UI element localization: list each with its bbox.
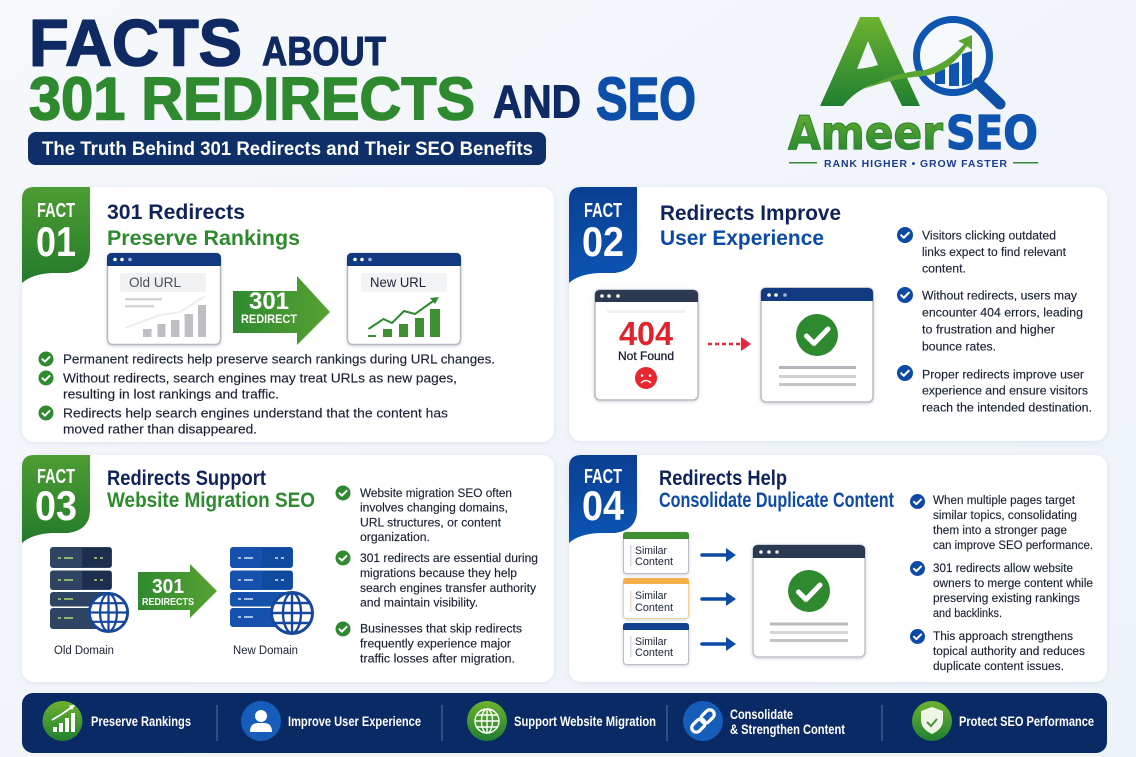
badge: fact 01: FACT (37, 200, 75, 222)
heading: fact 02 (660, 202, 841, 250)
heading: fact 04 (659, 467, 894, 512)
bullets: fact 04: When multiple pages target (933, 493, 1076, 507)
arrow: 301 redirects: 301 (152, 576, 184, 598)
bullets: fact 03 (336, 486, 538, 666)
bullets: fact 03: involves changing domains, (360, 500, 508, 514)
item: consolidate and strengthen content: Consolidate (730, 707, 793, 722)
browser: consolidated (753, 545, 865, 657)
heading: fact 01: Preserve Rankings (107, 227, 300, 250)
bullets: fact 03: frequently experience major (360, 636, 511, 650)
badge: fact 03: FACT (37, 466, 75, 488)
mini browser: blue (623, 623, 689, 664)
item: preserve rankings: Preserve Rankings (91, 714, 191, 729)
browser: 404: 404 (619, 315, 674, 352)
heading: fact 03: Redirects Support (107, 467, 266, 490)
bullets: fact 04: preserving existing rankings (933, 591, 1080, 605)
bullets: fact 03: and maintain visibility. (360, 596, 478, 610)
bullets: fact 03: Businesses that skip redirects (360, 622, 522, 636)
badge: fact 02: FACT (584, 200, 622, 222)
bullets: fact 01: Redirects help search engines understand that the content has (63, 406, 449, 420)
item: consolidate and strengthen content: & Strengthen Content (730, 722, 845, 737)
icon: globe old (89, 593, 128, 632)
panel: fact 01 (22, 187, 554, 442)
bullets: fact 02: experience and ensure visitors (922, 384, 1088, 398)
heading: fact 02: User Experience (660, 227, 824, 250)
bullets: fact 03: 301 redirects are essential during (360, 551, 538, 565)
bullets: fact 03: organization. (360, 530, 430, 544)
heading: fact 02: Redirects Improve (660, 202, 841, 225)
bullets: fact 03: traffic losses after migration. (360, 652, 515, 666)
server: new domain (230, 547, 312, 634)
label: old domain: Old Domain (54, 645, 114, 657)
bullets: fact 04 (910, 493, 1093, 673)
badge: fact 04: FACT (584, 466, 622, 488)
browser: old url (107, 253, 221, 344)
item: preserve rankings (42, 701, 191, 741)
bullets: fact 04: This approach strengthens (933, 629, 1073, 643)
bullets: fact 04: topical authority and reduces (933, 644, 1085, 658)
item: support website migration: Support Website Migration (514, 714, 656, 729)
logo letter A (820, 17, 920, 106)
mini browser: green: Similar (635, 545, 667, 557)
bullets: fact 01: moved rather than disappeared. (63, 422, 257, 436)
arrow: dashed red (708, 337, 751, 351)
item: protect seo performance: Protect SEO Performance (959, 714, 1094, 729)
arrow: 301 redirect: 301 (249, 288, 289, 315)
badge: fact 04: 04 (582, 482, 625, 529)
title: AND (493, 76, 581, 128)
arrow: 301 redirect: REDIRECT (241, 314, 297, 326)
heading: fact 03: Website Migration SEO (107, 489, 315, 512)
mini browser: green (623, 532, 689, 574)
mini browser: blue: Similar (635, 636, 667, 648)
title (29, 6, 696, 132)
logo wordmark: Ameer (788, 106, 943, 160)
panel: fact 04 (569, 455, 1107, 682)
title: FACTS (29, 6, 242, 80)
badge: fact 01 (22, 187, 90, 283)
badge: fact 01: 01 (36, 218, 76, 265)
subtitle pill: The Truth Behind 301 Redirects and Their SEO Benefits (42, 139, 533, 160)
logo tagline: RANK HIGHER • GROW FASTER (824, 158, 1007, 170)
mini browser: orange: Content (635, 602, 673, 614)
icon: globe new (272, 592, 312, 634)
item: consolidate and strengthen content (683, 701, 845, 741)
arrow: 301 redirect (233, 276, 330, 345)
badge: fact 04 (569, 455, 637, 543)
mini browser: orange: Similar (635, 590, 667, 602)
item: improve user experience (241, 701, 421, 741)
title: 301 REDIRECTS (29, 66, 475, 132)
bullets: fact 02: encounter 404 errors, leading (922, 306, 1083, 320)
heading: fact 04: Consolidate Duplicate Content (659, 489, 894, 512)
bullets: fact 01: Without redirects, search engines may treat URLs as new pages, (63, 370, 457, 386)
mini browser: green: Content (635, 556, 673, 568)
mini browser: blue: Content (635, 647, 673, 659)
badge: fact 03 (22, 455, 90, 543)
browser: new url: New URL (370, 274, 426, 290)
browser: 404 (595, 290, 698, 400)
bullets: fact 04: owners to merge content while (933, 576, 1093, 590)
title: ABOUT (262, 28, 386, 74)
bullets: fact 02: Proper redirects improve user (922, 368, 1084, 382)
item: support website migration (467, 701, 656, 741)
bullets: fact 02: bounce rates. (922, 340, 996, 354)
logo swoosh arrow (864, 35, 972, 89)
bullets: fact 04: 301 redirects allow website (933, 561, 1073, 575)
logo wordmark (788, 106, 1038, 160)
arrow: 301 redirects: REDIRECTS (142, 596, 194, 608)
bullets: fact 04: similar topics, consolidating (933, 508, 1077, 522)
bullets: fact 02: to frustration and higher (922, 322, 1055, 336)
logo: AmeerSEO (788, 17, 1038, 170)
bullets: fact 02: links expect to find relevant (922, 245, 1067, 259)
bullets: fact 04: can improve SEO performance. (933, 538, 1093, 552)
bullets: fact 01: resulting in lost rankings and traffic. (63, 386, 279, 402)
title: SEO (596, 66, 696, 132)
logo wordmark: SEO (946, 106, 1038, 160)
badge: fact 02 (569, 187, 637, 283)
bullets: fact 02: Without redirects, users may (922, 288, 1078, 302)
badge: fact 03: 03 (35, 482, 77, 529)
bullets: fact 04: duplicate content issues. (933, 659, 1064, 673)
bullets: fact 03: Website migration SEO often (360, 486, 512, 500)
bullets: fact 04: them into a stronger page (933, 523, 1067, 537)
heading: fact 04: Redirects Help (659, 467, 787, 490)
heading: fact 01: 301 Redirects (107, 201, 245, 224)
badge: fact 02: 02 (582, 218, 624, 265)
label: new domain: New Domain (233, 645, 298, 657)
heading: fact 03 (107, 467, 315, 512)
heading: fact 01 (107, 201, 300, 250)
panel: fact 02 (569, 187, 1107, 441)
bullets: fact 03: URL structures, or content (360, 516, 502, 530)
item: improve user experience: Improve User Experience (288, 714, 421, 729)
server: old domain (50, 547, 128, 632)
bullets: fact 02 (897, 227, 1092, 414)
browser: success (761, 288, 873, 402)
bullets: fact 03: search engines transfer authority (360, 581, 537, 595)
browser: new url (347, 253, 461, 344)
bullets: fact 03: migrations because they help (360, 566, 517, 580)
bottom summary bar (22, 693, 1107, 753)
mini browser: orange (623, 578, 689, 618)
browser: old url: Old URL (129, 274, 181, 290)
arrow: 301 redirects (138, 564, 217, 618)
bullets: fact 01: Permanent redirects help preserve search rankings during URL changes. (63, 352, 495, 366)
logo magnifier (916, 20, 1000, 104)
panel: fact 03 (22, 455, 554, 682)
browser: 404: Not Found (618, 349, 674, 363)
subtitle pill (28, 132, 546, 165)
bullets: fact 02: reach the intended destination. (922, 400, 1092, 414)
item: protect seo performance (912, 701, 1094, 741)
bullets: fact 01 (38, 352, 495, 436)
arrows: blue (702, 548, 736, 651)
bullets: fact 02: content. (922, 262, 966, 276)
bullets: fact 02: Visitors clicking outdated (922, 228, 1056, 242)
bullets: fact 04: and backlinks. (933, 606, 1002, 620)
